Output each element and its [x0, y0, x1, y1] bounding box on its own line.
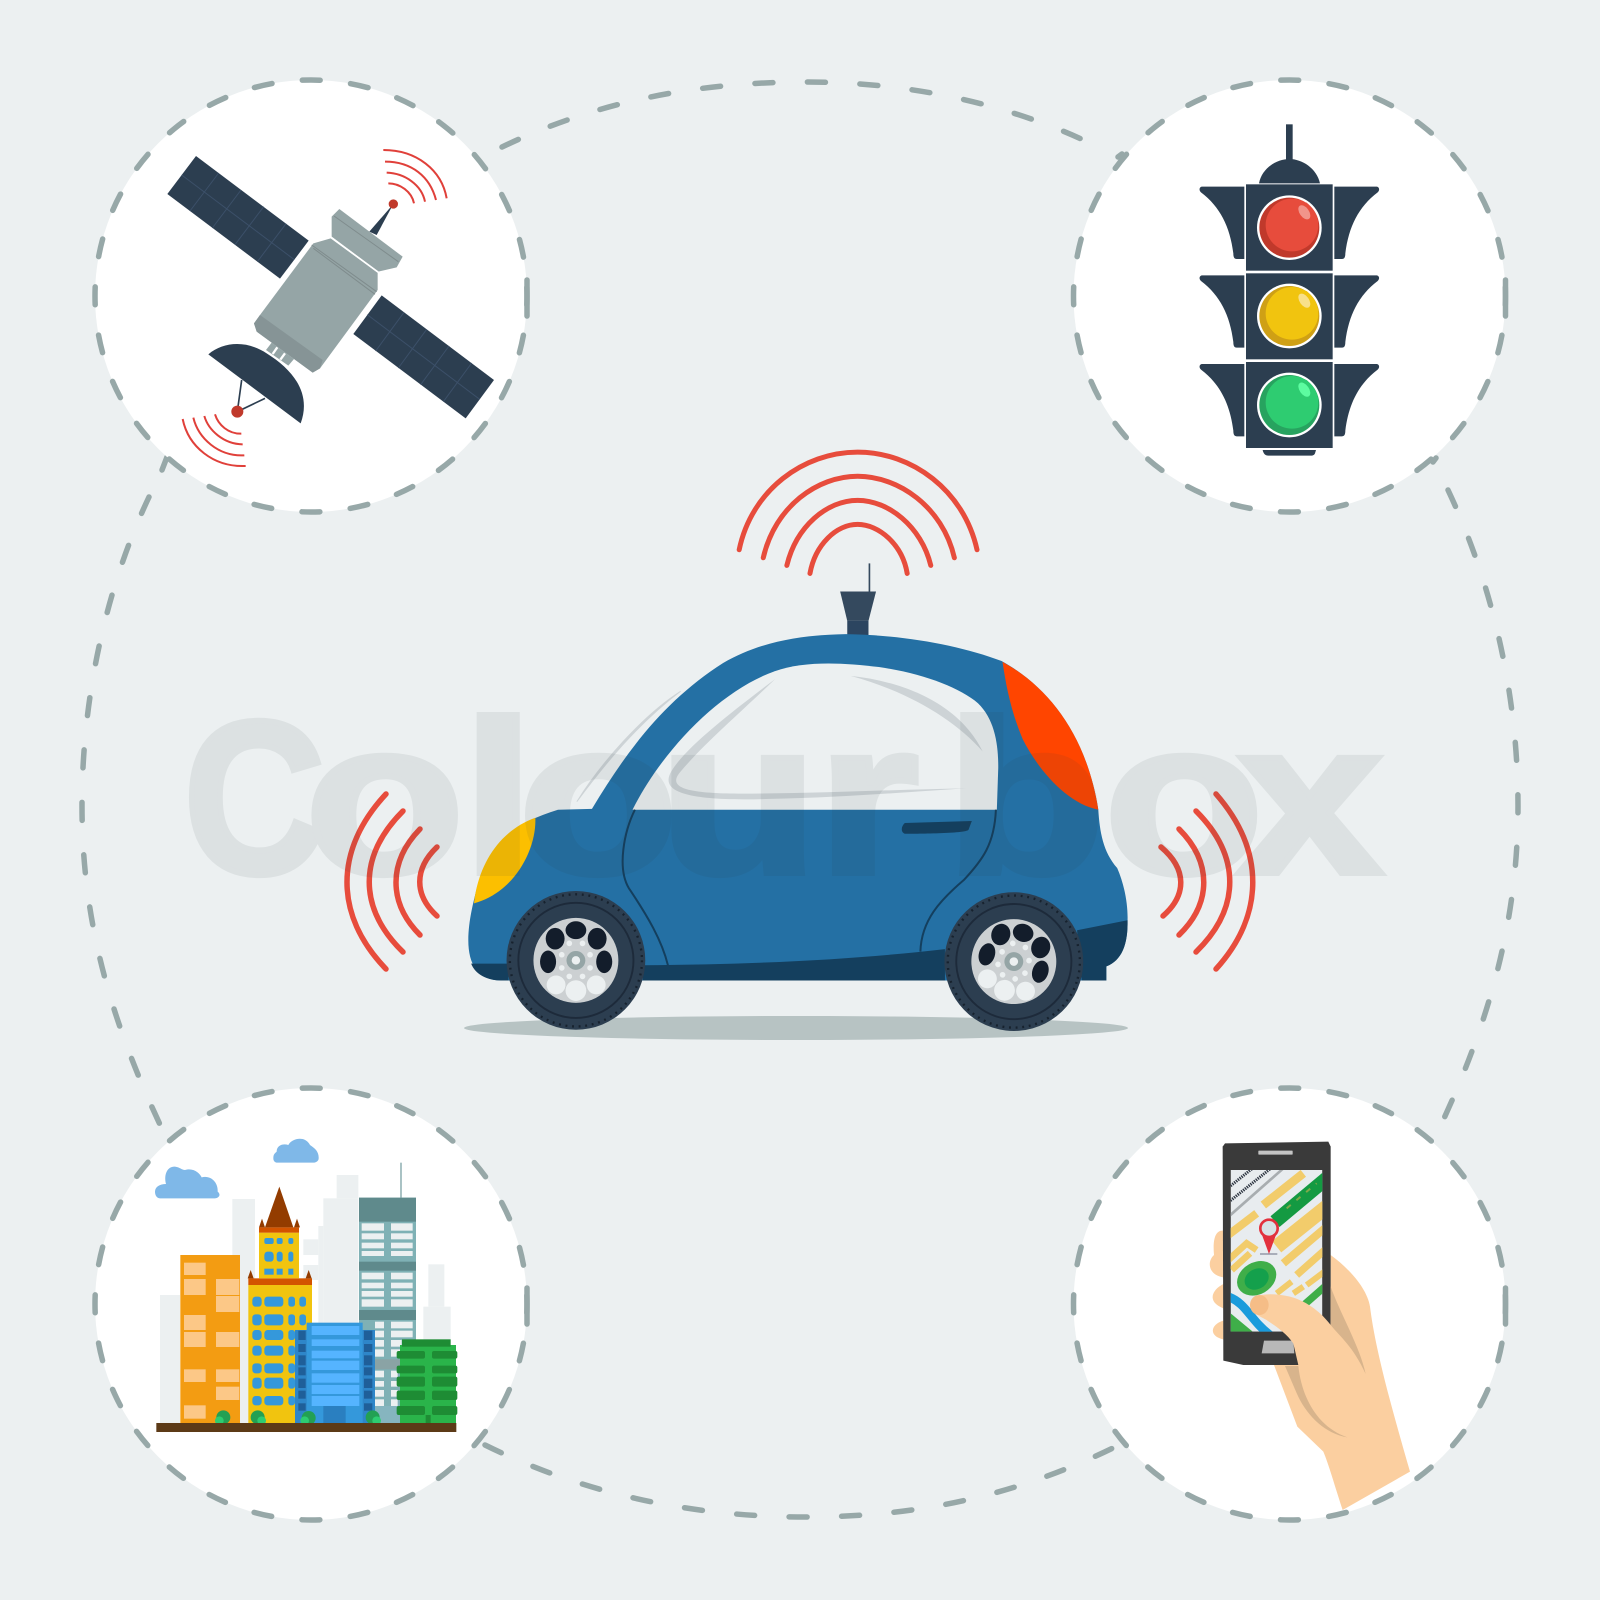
- window: [633, 663, 998, 810]
- watermark text: C: [184, 675, 325, 919]
- front wheel: [507, 891, 645, 1030]
- headlight: [474, 818, 535, 903]
- signal arcs above antenna: [739, 452, 977, 573]
- panel: satellite circle: [95, 80, 527, 512]
- building: yellow tower: [248, 1187, 312, 1423]
- fingers behind phone: [1210, 1231, 1370, 1347]
- signal arcs right of car: [1161, 794, 1253, 969]
- rear wheel: [926, 874, 1101, 1049]
- building: grey-teal tower: [359, 1163, 416, 1423]
- icon: hand holding phone with map: [1210, 1142, 1410, 1510]
- phone body: [1223, 1142, 1331, 1365]
- panel: phone navigation circle: [1074, 1088, 1506, 1520]
- window glare: [577, 676, 983, 802]
- yellow lamp: [1257, 284, 1322, 348]
- cloud: [273, 1139, 319, 1163]
- green lamp: [1257, 373, 1322, 437]
- hand and thumb: [1250, 1287, 1410, 1510]
- door handle: [902, 821, 972, 834]
- icon: satellite: [167, 150, 494, 466]
- self-driving car: [468, 452, 1128, 1049]
- building: green: [375, 1339, 457, 1423]
- red lamp: [1257, 195, 1322, 260]
- watermark text: olourbox: [305, 677, 1383, 920]
- signal arcs left of car: [347, 794, 437, 969]
- map screen: [1230, 1170, 1322, 1332]
- ground: [156, 1423, 456, 1432]
- hand shading: [1285, 1287, 1366, 1437]
- car shadow: [464, 1016, 1128, 1040]
- cloud: [155, 1167, 219, 1198]
- roof antenna: [840, 563, 876, 635]
- panel: traffic light circle: [1074, 80, 1506, 512]
- icon: city skyline: [155, 1139, 457, 1432]
- panel: city circle: [95, 1088, 527, 1520]
- car body: [468, 634, 1128, 980]
- building: orange: [180, 1255, 240, 1423]
- icon: traffic light: [1200, 124, 1379, 456]
- map pin: [1260, 1220, 1278, 1255]
- lower body trim: [471, 920, 1128, 980]
- door lines: [623, 810, 996, 965]
- rear light: [1003, 662, 1098, 810]
- bushes: [215, 1410, 381, 1425]
- building: blue: [295, 1323, 375, 1423]
